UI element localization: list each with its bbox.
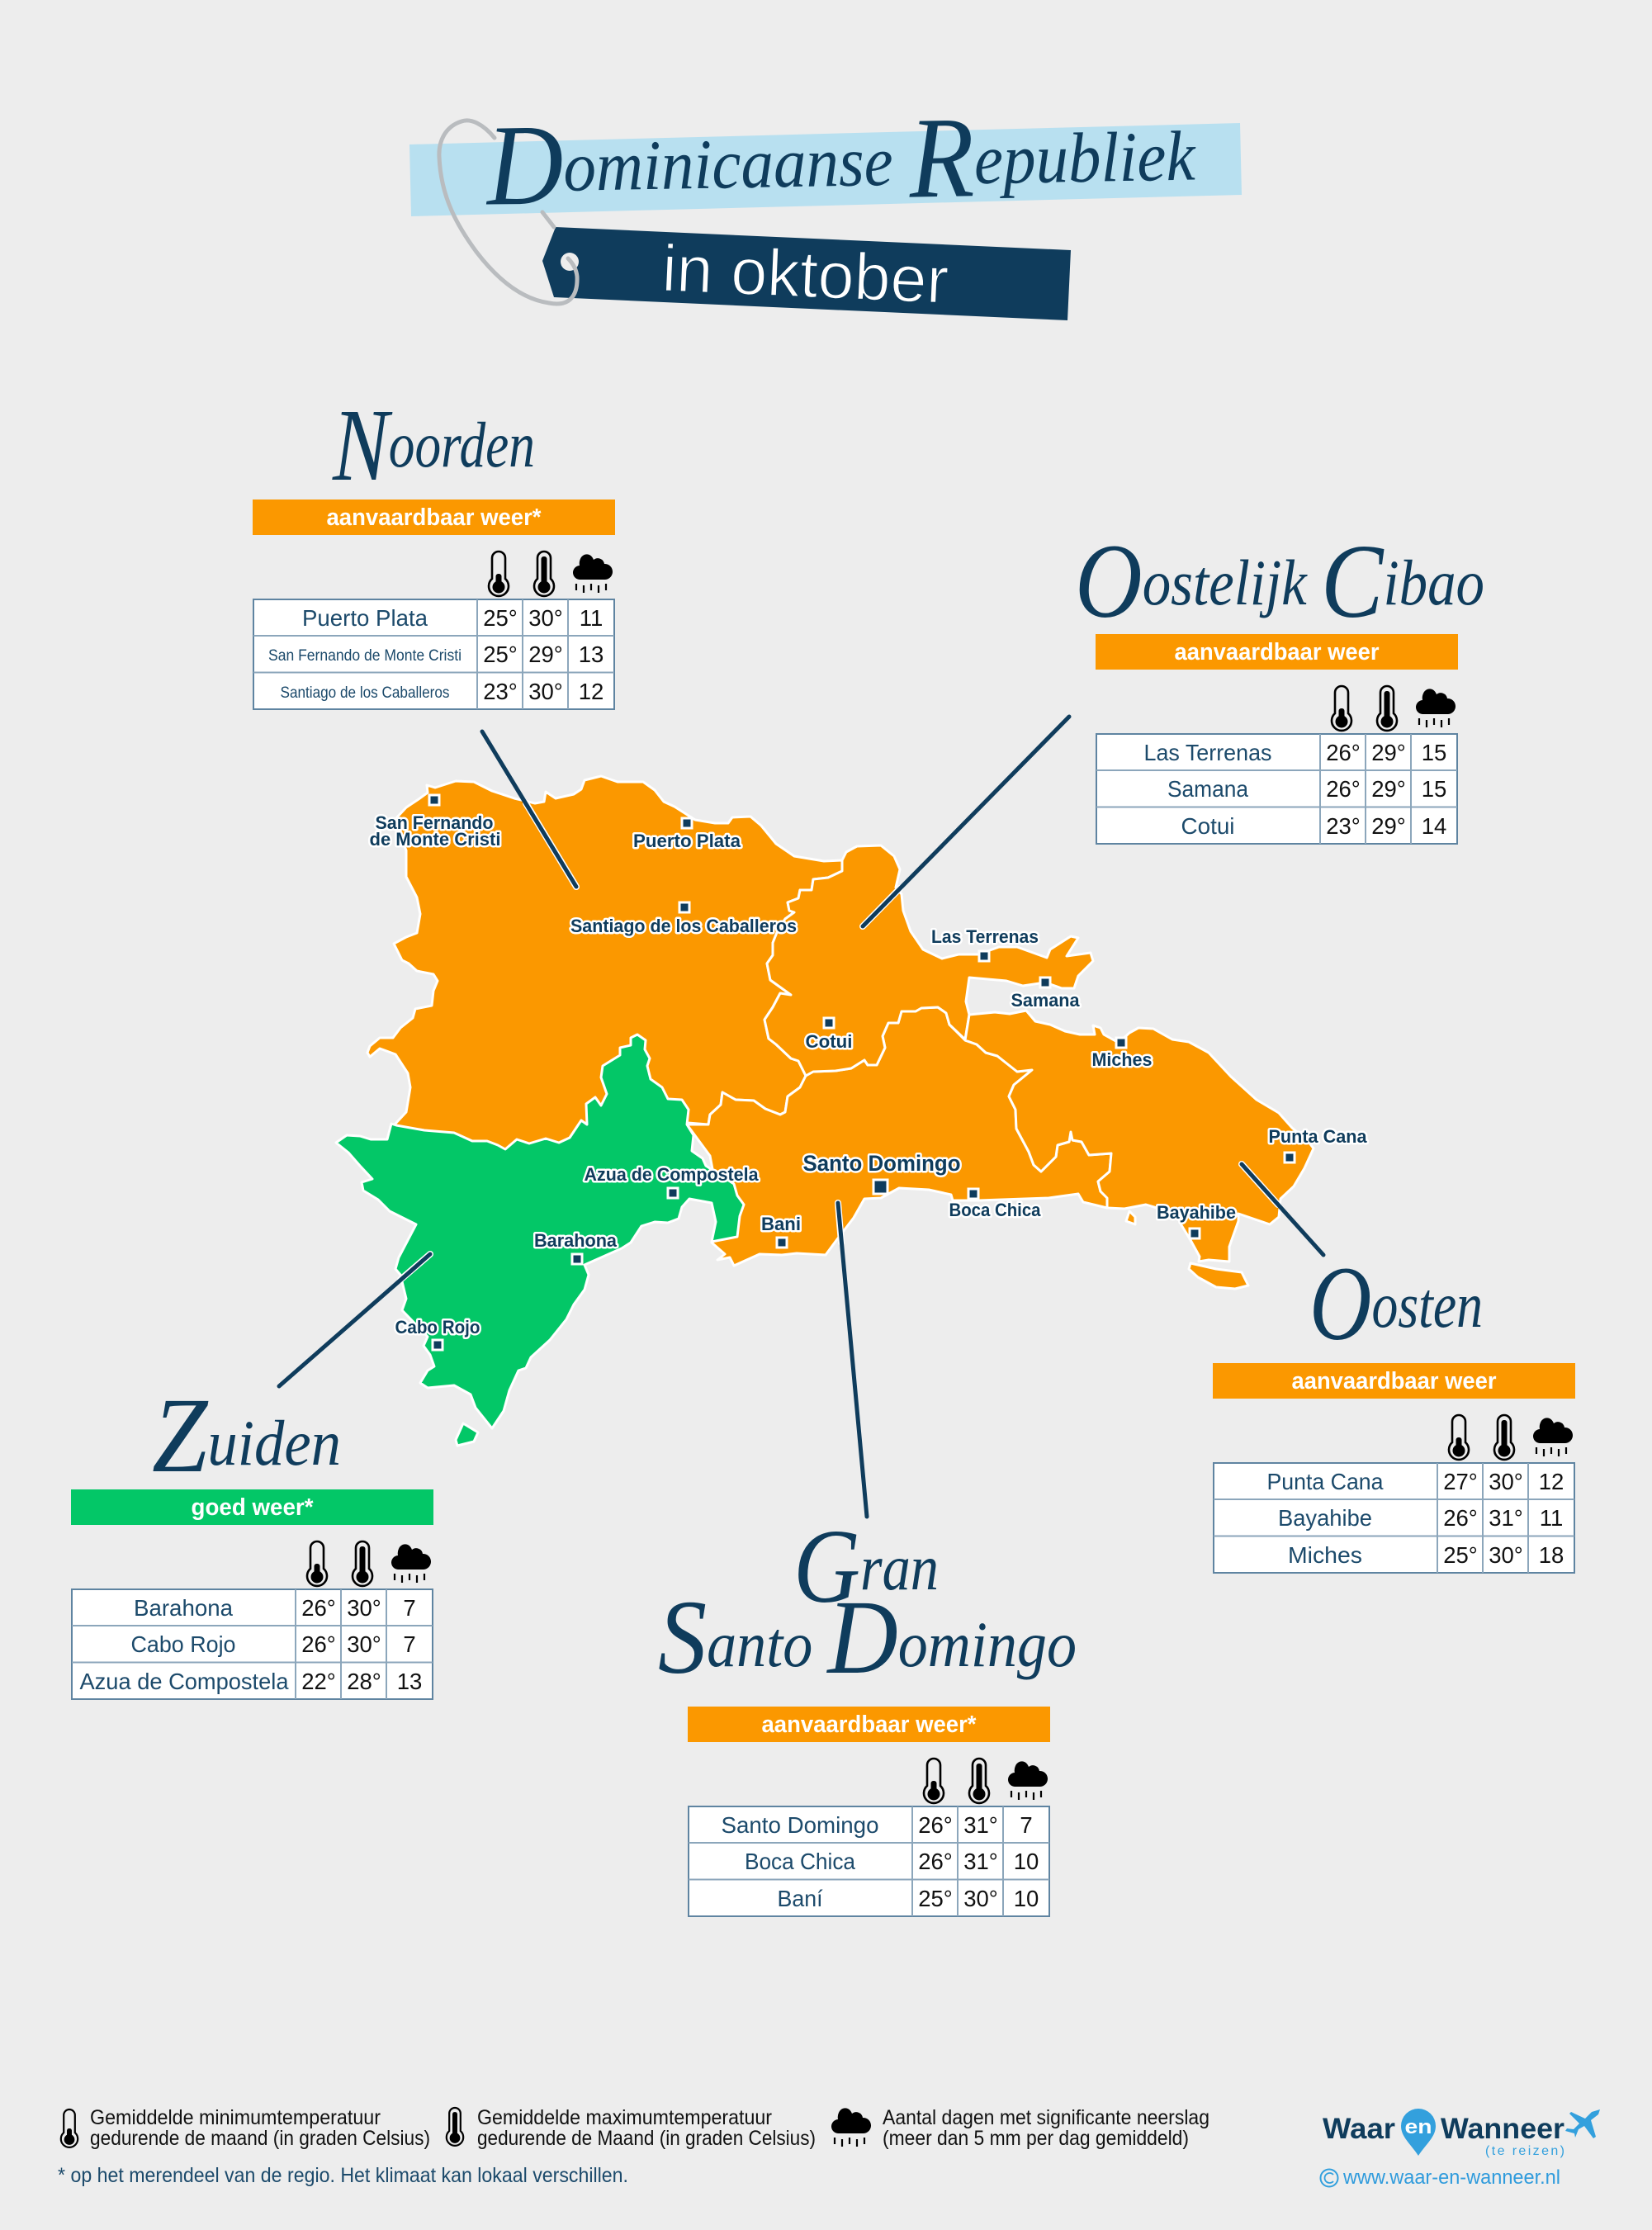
logo word: en: en — [1405, 2116, 1432, 2138]
legend text: max temperature: gedurende de Maand (in graden Celsius) — [477, 2127, 816, 2150]
table: 29° — [528, 642, 563, 667]
table: 11 — [580, 605, 603, 631]
label: San Fernando de Monte Cristi: de Monte Cristi — [370, 829, 500, 850]
table: 15 — [1422, 740, 1446, 765]
heading: Oostelijk Cibao: ibao — [1383, 547, 1484, 618]
icon: minimum temperature — [924, 1759, 944, 1803]
marker: Puerto Plata — [682, 818, 692, 828]
heading line: Santo Domingo: S — [658, 1579, 707, 1696]
table: 7 — [1020, 1812, 1033, 1838]
table: 18 — [1539, 1542, 1564, 1568]
status bar: aanvaardbaar weer* — [761, 1712, 977, 1738]
table: 10 — [1014, 1886, 1039, 1911]
leader: Oosten — [1242, 1164, 1323, 1255]
heading: Noorden: N — [332, 389, 393, 503]
status bar — [1213, 1363, 1575, 1399]
region: Gran Santo Domingo — [687, 1007, 1111, 1266]
leader: Gran Santo Domingo — [838, 1203, 867, 1517]
icon: minimum temperature — [1332, 686, 1351, 731]
table: 31° — [963, 1812, 998, 1838]
icon: maximum temperature — [1494, 1415, 1514, 1460]
label: Cotui: Cotui — [806, 1031, 852, 1052]
table: 12 — [1539, 1469, 1564, 1494]
legend icon: max temperature — [447, 2108, 463, 2146]
table: Barahona — [134, 1595, 233, 1621]
footnote: * op het merendeel van de regio. Het klimaat kan lokaal verschillen. — [58, 2164, 628, 2187]
table: 29° — [1371, 813, 1406, 839]
table: 26° — [1326, 740, 1361, 765]
label: Santiago: Santiago de los Caballeros — [570, 916, 797, 936]
table: 12 — [579, 679, 604, 704]
icon: rain — [1008, 1761, 1048, 1800]
table: 30° — [347, 1595, 381, 1621]
legend text: max temperature — [477, 2106, 816, 2150]
legend icon: min temperature — [61, 2109, 78, 2147]
table: 31° — [963, 1849, 998, 1874]
table: 25° — [918, 1886, 953, 1911]
table: 26° — [1443, 1505, 1478, 1531]
label: Bayahibe: Bayahibe — [1157, 1202, 1236, 1223]
status bar — [688, 1707, 1050, 1742]
marker: Santo Domingo — [873, 1180, 888, 1194]
heading: Oosten: osten — [1372, 1269, 1483, 1341]
heading line: Gran: G — [793, 1508, 860, 1625]
marker: Punta Cana — [1285, 1153, 1295, 1162]
legend text: rain: (meer dan 5 mm per dag gemiddeld) — [883, 2127, 1189, 2150]
icon: minimum temperature — [1449, 1415, 1469, 1460]
marker: Cabo Rojo — [433, 1340, 443, 1350]
label: San Fernando de Monte Cristi — [370, 812, 500, 850]
label: Azua de Compostela: Azua de Compostela — [585, 1164, 759, 1185]
table: 30° — [347, 1631, 381, 1657]
status bar — [71, 1489, 433, 1525]
marker: Samana — [1040, 978, 1050, 987]
table — [253, 599, 614, 709]
icon: plane — [1565, 2109, 1600, 2138]
table: 7 — [403, 1595, 416, 1621]
heading: Zuiden: Z — [152, 1376, 209, 1495]
table: 30° — [528, 679, 563, 704]
leader: Noorden — [482, 731, 576, 887]
region: Oostelijk Cibao — [764, 845, 1093, 1076]
table: Puerto Plata — [302, 605, 428, 631]
table — [72, 1589, 433, 1699]
heading: Noorden: oorden — [389, 409, 535, 481]
label: Puerto Plata: Puerto Plata — [633, 831, 741, 851]
label: Samana: Samana — [1011, 990, 1080, 1011]
island: east small — [1126, 1211, 1135, 1224]
label: Boca Chica: Boca Chica — [949, 1200, 1041, 1220]
icon: maximum temperature — [1377, 686, 1397, 731]
heading: Oosten: O — [1309, 1245, 1372, 1362]
status bar: goed weer* — [192, 1494, 314, 1521]
tag string — [439, 121, 577, 304]
table: 26° — [918, 1849, 953, 1874]
table: Bayahibe — [1278, 1505, 1372, 1531]
table: 13 — [397, 1669, 422, 1694]
table: Azua de Compostela — [79, 1669, 289, 1694]
heading line: Gran: ran — [860, 1532, 939, 1603]
marker: Bani — [777, 1238, 787, 1248]
icon: maximum temperature — [353, 1541, 372, 1586]
table: 23° — [483, 679, 518, 704]
status bar — [1096, 634, 1458, 670]
table: San Fernando de Monte Cristi — [268, 647, 462, 665]
tag — [542, 227, 1071, 320]
label: Santo Domingo: Santo Domingo — [802, 1151, 961, 1176]
heading: Oostelijk Cibao: O — [1075, 523, 1143, 640]
heading line: Santo Domingo: omingo — [898, 1608, 1077, 1680]
table: 26° — [1326, 776, 1361, 802]
table: 28° — [347, 1669, 381, 1694]
heading: Zuiden: uiden — [207, 1407, 341, 1479]
heading: Oostelijk Cibao: C — [1321, 523, 1385, 640]
legend text: rain — [883, 2106, 1209, 2150]
table — [1214, 1463, 1574, 1573]
island: Saona — [1189, 1263, 1248, 1289]
leader lines — [279, 717, 1323, 1517]
legend text: max temperature: Gemiddelde maximumtemperatuur — [477, 2106, 772, 2129]
table: Cotui — [1181, 813, 1235, 839]
logo word: Waar: Waar — [1323, 2113, 1395, 2145]
status bar — [253, 500, 615, 535]
table: Baní — [778, 1886, 823, 1911]
table: 11 — [1540, 1505, 1563, 1531]
label: Barahona: Barahona — [534, 1230, 618, 1251]
table: 13 — [579, 642, 604, 667]
copyright icon — [1321, 2170, 1337, 2186]
label: San Fernando de Monte Cristi: San Fernando — [375, 812, 494, 833]
icon: rain — [1533, 1418, 1573, 1456]
website: www.waar-en-wanneer.nl — [1342, 2166, 1560, 2189]
marker: Miches — [1116, 1038, 1126, 1048]
legend text: min temperature: Gemiddelde minimumtemperatuur — [90, 2106, 381, 2129]
table: 30° — [1489, 1542, 1523, 1568]
icon: rain — [573, 554, 613, 593]
table: 30° — [963, 1886, 998, 1911]
table: 25° — [483, 642, 518, 667]
legend icon: rain — [831, 2108, 871, 2147]
legend — [58, 2106, 1209, 2187]
table: 26° — [301, 1595, 336, 1621]
icon: minimum temperature — [307, 1541, 327, 1586]
table: 30° — [528, 605, 563, 631]
icon: minimum temperature — [489, 552, 509, 596]
main title: ominicaanse — [563, 121, 910, 206]
table: Punta Cana — [1266, 1469, 1384, 1494]
panel: Gran Santo Domingo — [688, 1707, 1050, 1916]
leader: Oostelijk Cibao — [863, 717, 1069, 926]
legend text: min temperature — [90, 2106, 430, 2150]
table: 30° — [1489, 1469, 1523, 1494]
icon: maximum temperature — [534, 552, 554, 596]
leader: Zuiden — [279, 1254, 430, 1386]
tag hole — [561, 253, 579, 271]
table: 14 — [1422, 813, 1446, 839]
city markers — [429, 795, 1295, 1350]
table: 31° — [1489, 1505, 1523, 1531]
status bar: aanvaardbaar weer* — [327, 504, 542, 531]
panel: Oostelijk Cibao — [1096, 634, 1458, 844]
table: Samana — [1167, 776, 1248, 802]
table: 15 — [1422, 776, 1446, 802]
panel: Noorden — [253, 500, 615, 709]
marker: Cotui — [824, 1018, 834, 1028]
table — [689, 1806, 1049, 1916]
marker: Las Terrenas — [979, 951, 989, 961]
label: Cabo Rojo: Cabo Rojo — [395, 1317, 480, 1338]
marker: Santiago — [679, 902, 689, 912]
title band — [409, 123, 1242, 216]
legend text: rain: Aantal dagen met significante neerslag — [883, 2106, 1209, 2129]
table: 25° — [1443, 1542, 1478, 1568]
table: Santo Domingo — [722, 1812, 878, 1838]
legend text: min temperature: gedurende de maand (in graden Celsius) — [90, 2127, 430, 2150]
region: Zuiden — [336, 1035, 744, 1428]
title block — [409, 90, 1242, 320]
table: Santiago de los Caballeros — [281, 684, 449, 702]
status bar: aanvaardbaar weer — [1291, 1368, 1496, 1394]
marker: Boca Chica — [968, 1189, 978, 1199]
table: Boca Chica — [745, 1849, 855, 1874]
table: 26° — [918, 1812, 953, 1838]
table: 10 — [1014, 1849, 1039, 1874]
logo tagline: (te reizen) — [1485, 2144, 1564, 2158]
map — [336, 776, 1314, 1446]
table: 29° — [1371, 776, 1406, 802]
region: Noorden — [367, 776, 842, 1156]
icon: rain — [1416, 689, 1456, 727]
status bar: aanvaardbaar weer — [1174, 639, 1379, 665]
subtitle: in oktober — [660, 231, 950, 317]
table: 25° — [483, 605, 518, 631]
main title: R — [907, 93, 975, 223]
label: Miches: Miches — [1091, 1049, 1153, 1070]
panel: Zuiden — [71, 1489, 433, 1699]
logo pin — [1401, 2109, 1436, 2156]
table: 22° — [301, 1669, 336, 1694]
island: Beata — [456, 1423, 478, 1446]
table: 7 — [403, 1631, 416, 1657]
logo word: Wanneer: Wanneer — [1441, 2113, 1564, 2145]
main title: D — [484, 101, 565, 230]
table: 29° — [1371, 740, 1406, 765]
heading: Oostelijk Cibao: ostelijk — [1143, 547, 1321, 618]
marker: Bayahibe — [1190, 1229, 1200, 1238]
marker: San Fernando — [429, 795, 439, 805]
table: Cabo Rojo — [130, 1631, 236, 1657]
label: Las Terrenas: Las Terrenas — [931, 926, 1039, 947]
table: 27° — [1443, 1469, 1478, 1494]
label: Punta Cana: Punta Cana — [1268, 1126, 1367, 1147]
table: 26° — [301, 1631, 336, 1657]
table: Las Terrenas — [1144, 740, 1271, 765]
icon: maximum temperature — [969, 1759, 989, 1803]
table: Miches — [1288, 1542, 1362, 1568]
icon: rain — [391, 1544, 431, 1583]
heading line: Santo Domingo: D — [826, 1579, 898, 1696]
table: 23° — [1326, 813, 1361, 839]
main title: epubliek — [973, 116, 1197, 199]
table — [1096, 734, 1457, 844]
region: Oosten — [965, 1011, 1314, 1262]
marker: Barahona — [572, 1254, 582, 1264]
logo — [1321, 2109, 1600, 2189]
heading: Gran Santo Domingo — [658, 1508, 1077, 1696]
city labels — [370, 812, 1367, 1338]
label: Bani: Bani — [761, 1214, 801, 1234]
panel: Oosten — [1213, 1363, 1575, 1573]
heading line: Santo Domingo: anto — [707, 1608, 827, 1680]
marker: Azua — [668, 1188, 678, 1198]
